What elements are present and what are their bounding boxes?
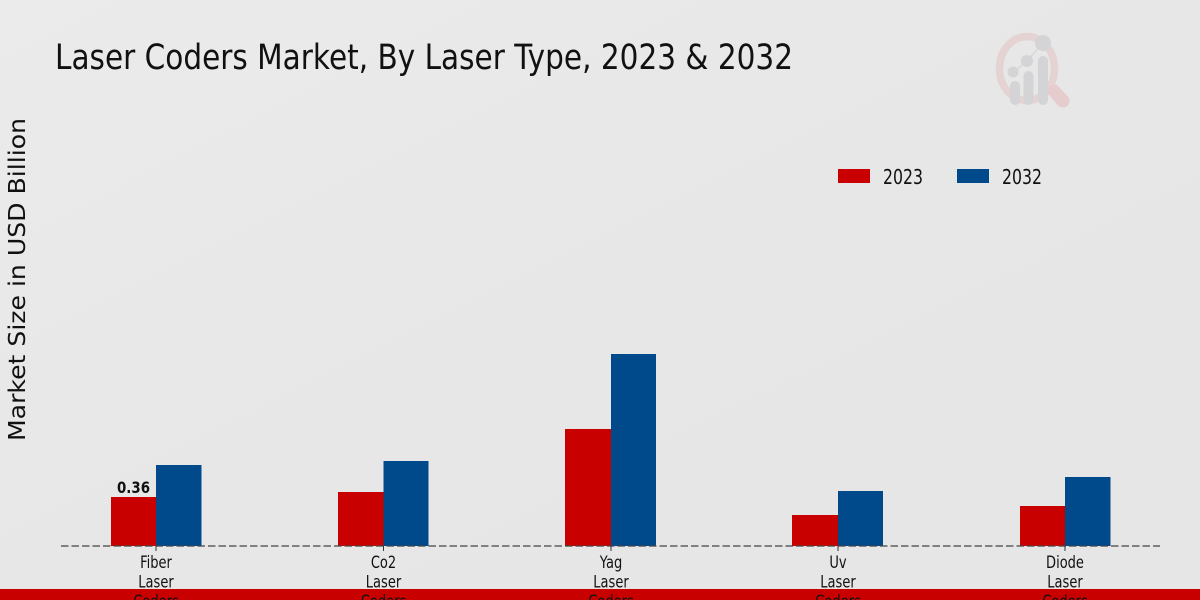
x-axis label: Co2 Laser Coders: Laser <box>366 572 402 592</box>
x-axis label: Diode Laser Coders: Diode <box>1046 552 1084 572</box>
x-axis label: Fiber Laser Coders: Laser <box>138 572 174 592</box>
x-axis label: Co2 Laser Coders: Co2 <box>371 552 396 572</box>
bars: Diode Laser Coders <box>1020 477 1110 546</box>
x-axis label: Uv Laser Coders <box>815 552 861 600</box>
legend <box>838 165 1042 189</box>
bars: Uv Laser Coders <box>792 491 883 546</box>
x-axis label: Yag Laser Coders: Yag <box>599 552 622 572</box>
bars: Co2 Laser Coders <box>338 461 428 546</box>
footer band <box>0 589 1200 600</box>
logo watermark <box>1000 35 1063 105</box>
x-axis label: Co2 Laser Coders <box>361 552 406 600</box>
bars: Fiber Laser Coders <box>111 465 202 546</box>
x-axis label: Yag Laser Coders <box>588 552 634 600</box>
legend item: 2023 <box>838 165 923 189</box>
bar chart <box>61 354 1160 551</box>
legend item: 2023: 2023 <box>883 165 923 189</box>
x-axis label: Uv Laser Coders: Uv <box>829 552 847 572</box>
legend item: 2032: 2032 <box>1002 165 1042 189</box>
value label: 0.36 <box>117 478 150 497</box>
legend item: 2032 <box>957 165 1042 189</box>
x-axis label: Fiber Laser Coders <box>133 552 179 600</box>
x-axis label: Fiber Laser Coders: Fiber <box>140 552 173 572</box>
x-axis label: Yag Laser Coders: Laser <box>593 572 629 592</box>
x-axis label: Diode Laser Coders: Laser <box>1047 572 1083 592</box>
x-axis label: Uv Laser Coders: Laser <box>820 572 856 592</box>
title: Laser Coders Market, By Laser Type, 2023 & 2032 <box>55 38 793 78</box>
bars: Yag Laser Coders <box>565 354 656 546</box>
x-axis label: Diode Laser Coders <box>1042 552 1088 600</box>
y-axis title: Market Size in USD Billion <box>5 118 31 441</box>
